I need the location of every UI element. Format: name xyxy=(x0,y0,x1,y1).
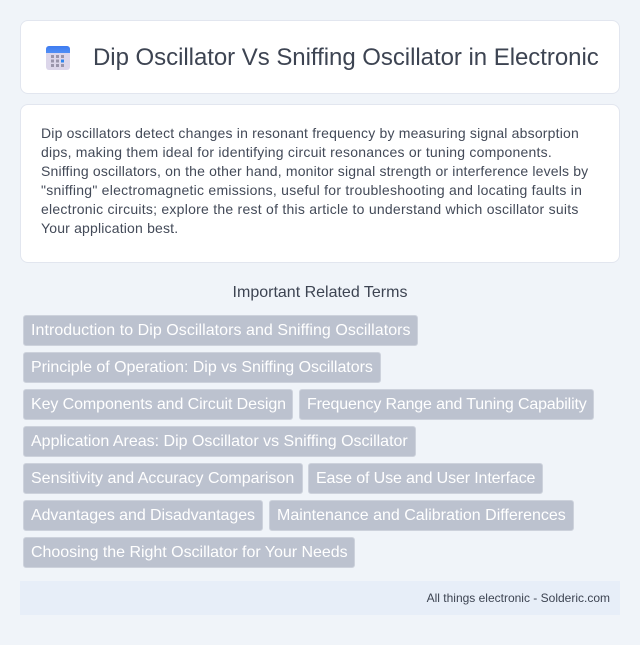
summary text: electronic circuits; explore the rest of this article to understand which oscillator suits xyxy=(41,201,579,217)
tag xyxy=(23,352,381,383)
tag xyxy=(269,500,574,531)
summary text: dips, making them ideal for identifying circuit resonances or tuning components. xyxy=(41,144,552,160)
summary text xyxy=(41,125,588,236)
footer bar xyxy=(20,581,620,615)
icon: calendar grid xyxy=(46,46,70,70)
tag xyxy=(23,500,263,531)
summary text: "sniffing" electromagnetic emissions, useful for troubleshooting and locating faults in xyxy=(41,182,582,198)
tag xyxy=(299,389,594,420)
summary card xyxy=(20,104,620,263)
tag: Frequency Range and Tuning Capability xyxy=(307,396,587,413)
footer credit: All things electronic - Solderic.com xyxy=(427,591,610,605)
tag: Advantages and Disadvantages xyxy=(31,507,255,524)
tag xyxy=(308,463,543,494)
header card xyxy=(20,20,620,94)
tag: Principle of Operation: Dip vs Sniffing Oscillators xyxy=(31,359,373,376)
summary text: Your application best. xyxy=(41,220,178,236)
tag xyxy=(23,463,303,494)
tag: Sensitivity and Accuracy Comparison xyxy=(31,470,294,487)
tag: Key Components and Circuit Design xyxy=(31,396,286,413)
tag: Ease of Use and User Interface xyxy=(316,470,535,487)
tag: Choosing the Right Oscillator for Your Needs xyxy=(31,544,348,561)
heading: important related terms: Important Related Terms xyxy=(233,284,407,301)
tag list xyxy=(23,315,594,568)
tag xyxy=(23,426,416,457)
tag xyxy=(23,389,293,420)
summary text: Sniffing oscillators, on the other hand, monitor signal strength or interference levels by xyxy=(41,163,588,179)
tag: Application Areas: Dip Oscillator vs Sniffing Oscillator xyxy=(31,433,408,450)
tag xyxy=(23,315,418,346)
title: Dip Oscillator Vs Sniffing Oscillator in Electronic xyxy=(93,44,599,71)
tag: Introduction to Dip Oscillators and Sniffing Oscillators xyxy=(31,322,411,339)
summary text: Dip oscillators detect changes in resonant frequency by measuring signal absorption xyxy=(41,125,579,141)
tag: Maintenance and Calibration Differences xyxy=(277,507,566,524)
tag xyxy=(23,537,355,568)
